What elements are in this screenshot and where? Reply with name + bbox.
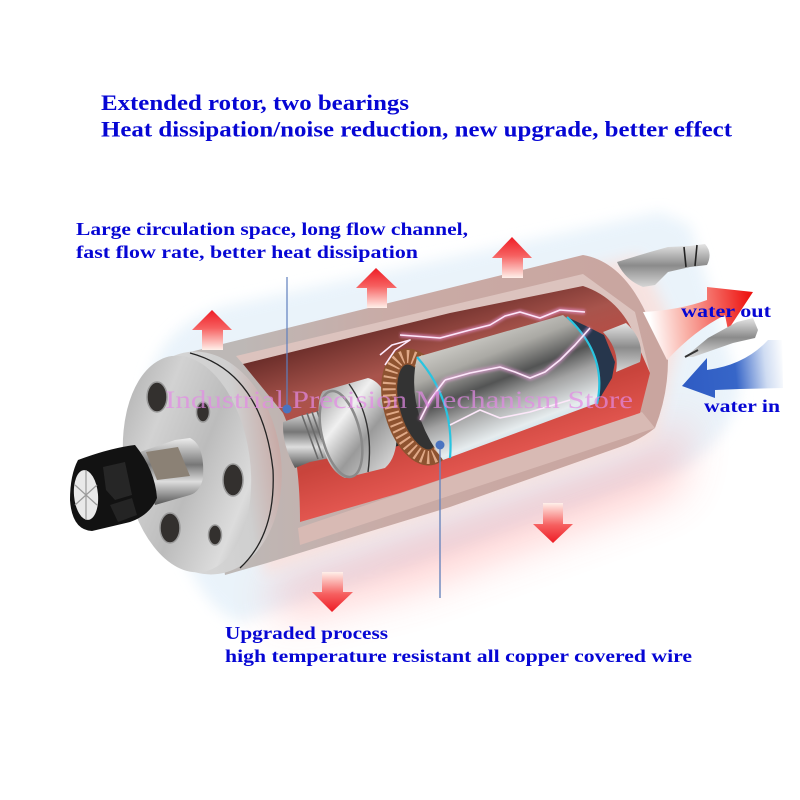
housing shell	[190, 255, 668, 575]
callout text: copper wire: Upgraded process	[225, 623, 388, 643]
heat arrow down right	[533, 503, 573, 543]
flange mounting holes	[147, 382, 243, 545]
rotor cyan rings	[417, 317, 599, 458]
front flange face	[109, 347, 265, 581]
front flange rim	[110, 341, 296, 585]
cooling glow behind the spindle	[148, 212, 740, 622]
bearing	[312, 378, 397, 481]
black shaft behind bearing	[380, 385, 425, 448]
electric lightning arcs	[380, 310, 590, 425]
callout text: circulation space: fast flow rate, better heat dissipation	[76, 242, 418, 262]
lower water fitting	[685, 318, 758, 357]
water out arrow	[643, 287, 753, 360]
label: water out: water out	[681, 301, 771, 321]
rotor cylinder	[414, 315, 600, 460]
heat arrow down left	[312, 572, 353, 612]
top water fitting	[617, 244, 710, 287]
ER collet nut	[70, 445, 157, 531]
spindle nose shaft	[140, 438, 203, 505]
callout line: copper wire	[436, 440, 444, 598]
heat arrow up middle	[356, 268, 397, 308]
heading: Heat dissipation/noise reduction, new upgrade, better effect	[101, 116, 733, 142]
callout text: circulation space: Large circulation space, long flow channel,	[76, 219, 468, 239]
copper coil	[379, 350, 457, 464]
flange groove line	[190, 353, 273, 568]
threaded shaft	[283, 408, 345, 468]
heat arrow up left	[192, 310, 232, 350]
heading: Extended rotor, two bearings	[101, 90, 409, 115]
callout text: copper wire: high temperature resistant all copper covered wire	[225, 646, 692, 666]
water in arrow	[682, 340, 783, 398]
callout text: circulation space	[76, 219, 468, 262]
callout text: copper wire	[225, 623, 692, 666]
label: water in: water in	[704, 396, 780, 416]
heat arrow up right	[492, 237, 532, 278]
heading	[101, 90, 733, 142]
inner cavity	[243, 286, 650, 522]
watermark: Industrial Precision Mechanism Store	[165, 387, 633, 414]
rotor rear end and silver bearing	[567, 317, 641, 403]
housing bottom lip	[298, 412, 655, 545]
housing top lip	[236, 274, 650, 380]
callout line: circulation space	[282, 277, 292, 414]
